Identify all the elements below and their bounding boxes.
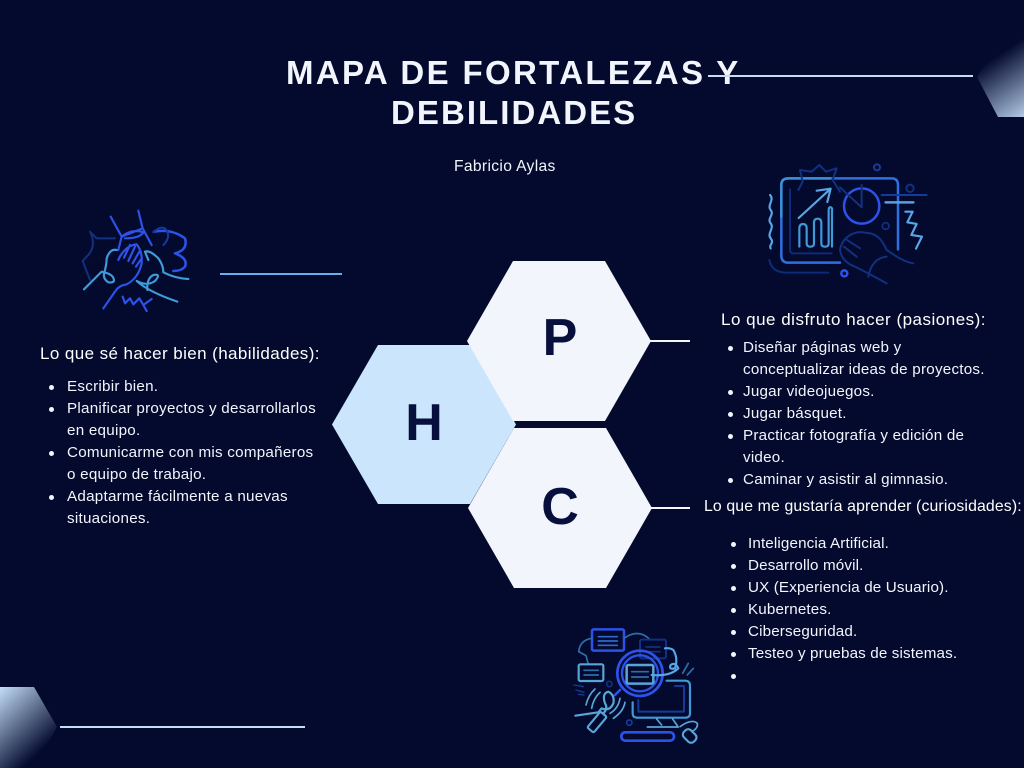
list: curiosidades: Inteligencia Artificial. [748, 535, 889, 552]
hexagon P [467, 261, 651, 421]
heading: pasiones: Lo que disfruto hacer (pasiones): [721, 310, 986, 329]
corner shape: top right [977, 38, 1024, 117]
hexagon letter H: H [405, 394, 443, 452]
panel: pasiones [721, 310, 986, 488]
list: pasiones: Practicar fotografía y edición de [743, 427, 964, 444]
list: pasiones: Diseñar páginas web y [743, 339, 901, 356]
corner shape: bottom left [0, 687, 57, 768]
icon: joined hands [83, 211, 188, 311]
panel: curiosidades [704, 498, 1022, 679]
list: habilidades: Planificar proyectos y desarrollarlos [67, 400, 316, 417]
list: curiosidades: Desarrollo móvil. [748, 557, 863, 574]
list: habilidades: o equipo de trabajo. [67, 466, 206, 483]
title [286, 54, 741, 131]
list: curiosidades: Testeo y pruebas de sistemas. [748, 645, 957, 662]
connector P [650, 340, 690, 342]
hexagon C [468, 428, 652, 588]
author name: Fabricio Aylas [454, 158, 556, 175]
list: curiosidades: UX (Experiencia de Usuario). [748, 579, 949, 596]
list: pasiones: Jugar videojuegos. [743, 383, 875, 400]
list: habilidades [49, 378, 316, 527]
icon: search and computer [574, 629, 698, 744]
list: pasiones [728, 339, 985, 488]
hexagon letter C: C [541, 478, 579, 536]
connector C [650, 507, 690, 509]
title: DEBILIDADES [391, 94, 637, 131]
icon: chart dashboard [769, 164, 927, 283]
list: curiosidades [731, 535, 957, 679]
heading: curiosidades: Lo que me gustaría aprender (curiosidades): [704, 498, 1022, 515]
bottom rule [60, 726, 305, 728]
heading: habilidades: Lo que sé hacer bien (habilidades): [40, 344, 320, 363]
list: pasiones: Jugar básquet. [743, 405, 847, 422]
list: habilidades: Comunicarme con mis compañeros [67, 444, 313, 461]
list: curiosidades: Ciberseguridad. [748, 623, 857, 640]
panel: habilidades [40, 344, 320, 527]
list: pasiones: Caminar y asistir al gimnasio. [743, 471, 948, 488]
list: habilidades: en equipo. [67, 422, 140, 439]
top rule [708, 75, 973, 77]
hexagon letter P: P [543, 309, 577, 367]
list: pasiones: video. [743, 449, 785, 466]
list: habilidades: Escribir bien. [67, 378, 158, 395]
title: MAPA DE FORTALEZAS Y [286, 54, 741, 91]
list: habilidades: situaciones. [67, 510, 150, 527]
list: curiosidades: Kubernetes. [748, 601, 831, 618]
hexagon H [332, 345, 516, 504]
list: pasiones: conceptualizar ideas de proyectos. [743, 361, 985, 378]
list: habilidades: Adaptarme fácilmente a nuevas [67, 488, 288, 505]
left icon rule [220, 273, 342, 275]
